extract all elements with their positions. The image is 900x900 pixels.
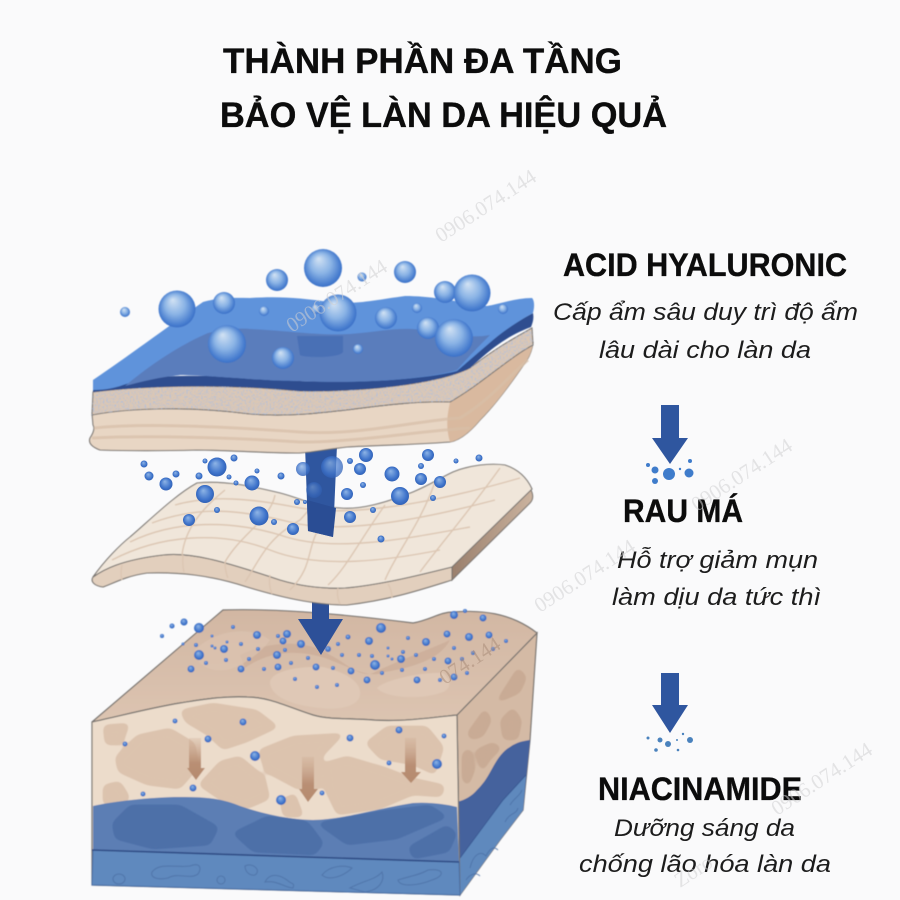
watermarks: 0906.074.144 — [687, 433, 797, 516]
watermarks: 0906.074.144 — [767, 737, 877, 820]
watermarks: Zoro — [670, 850, 717, 892]
text: Rau má description — [612, 546, 821, 611]
heading: Acid Hyaluronic: ACID HYALURONIC — [563, 247, 847, 283]
block blue band — [93, 797, 459, 862]
icon: arrow with droplets 1 — [646, 405, 694, 484]
particles between layers — [140, 448, 482, 542]
tan stripes — [92, 360, 528, 442]
heading: Niacinamide: NIACINAMIDE — [598, 771, 802, 807]
icon: arrow with droplets 2 — [646, 673, 693, 752]
text: Niacinamide description: chống lão hóa làn da — [579, 851, 831, 878]
sheet front edge — [92, 554, 452, 605]
heading: Rau má: RAU MÁ — [623, 493, 743, 529]
block right face blue band — [457, 740, 530, 895]
watermarks: 0906.074.144 — [282, 254, 392, 337]
blue film inner pool — [125, 329, 490, 386]
text: Niacinamide description: Dưỡng sáng da — [614, 815, 795, 842]
text: Rau má description: làm dịu da tức thì — [612, 584, 821, 611]
grain texture — [90, 325, 535, 420]
title: THÀNH PHẦN ĐA TẦNG — [223, 41, 622, 81]
illustration: layer 3 skin block — [92, 609, 537, 895]
block top face — [92, 610, 537, 722]
blue film well — [297, 336, 343, 357]
text: Acid Hyaluronic description: lâu dài cho làn da — [599, 337, 811, 364]
sheet top face — [93, 464, 532, 588]
spheres — [120, 249, 508, 369]
watermarks: 0906.074.144 — [530, 534, 640, 617]
blue film dark edge — [93, 313, 533, 392]
title — [220, 41, 667, 135]
watermarks: 074.144 — [435, 632, 505, 689]
block right face — [457, 633, 537, 895]
brown arrows — [187, 738, 421, 802]
sheet mesh lines — [112, 468, 520, 604]
block top face cells — [195, 631, 450, 709]
text: Acid Hyaluronic description: Cấp ẩm sâu duy trì độ ẩm — [553, 299, 858, 326]
block right face cells — [462, 667, 527, 787]
arrow: shaft through sheet — [305, 445, 337, 537]
block lower squiggles — [113, 865, 441, 892]
tan band right shading — [447, 343, 533, 442]
text: Niacinamide description — [579, 815, 831, 878]
arrow: sheet to block — [298, 600, 343, 655]
illustration: layer 1 top skin with water film — [89, 249, 535, 453]
title: BẢO VỆ LÀN DA HIỆU QUẢ — [220, 95, 667, 135]
block front face — [92, 697, 460, 895]
watermarks — [282, 164, 877, 892]
text: Rau má description: Hỗ trợ giảm mụn — [617, 546, 818, 574]
watermarks: 0906.074.144 — [431, 164, 541, 247]
illustration: layer 2 mesh sheet — [92, 464, 533, 605]
text: Acid Hyaluronic description — [553, 299, 858, 364]
block lower blue layer — [92, 850, 460, 895]
dots on block — [122, 609, 508, 805]
block dark blue cells — [112, 805, 457, 859]
sheet right end — [452, 488, 533, 580]
grainy layer — [92, 328, 533, 415]
tan lower band — [89, 343, 533, 453]
blue film top — [93, 296, 534, 390]
block front cells — [103, 703, 445, 817]
